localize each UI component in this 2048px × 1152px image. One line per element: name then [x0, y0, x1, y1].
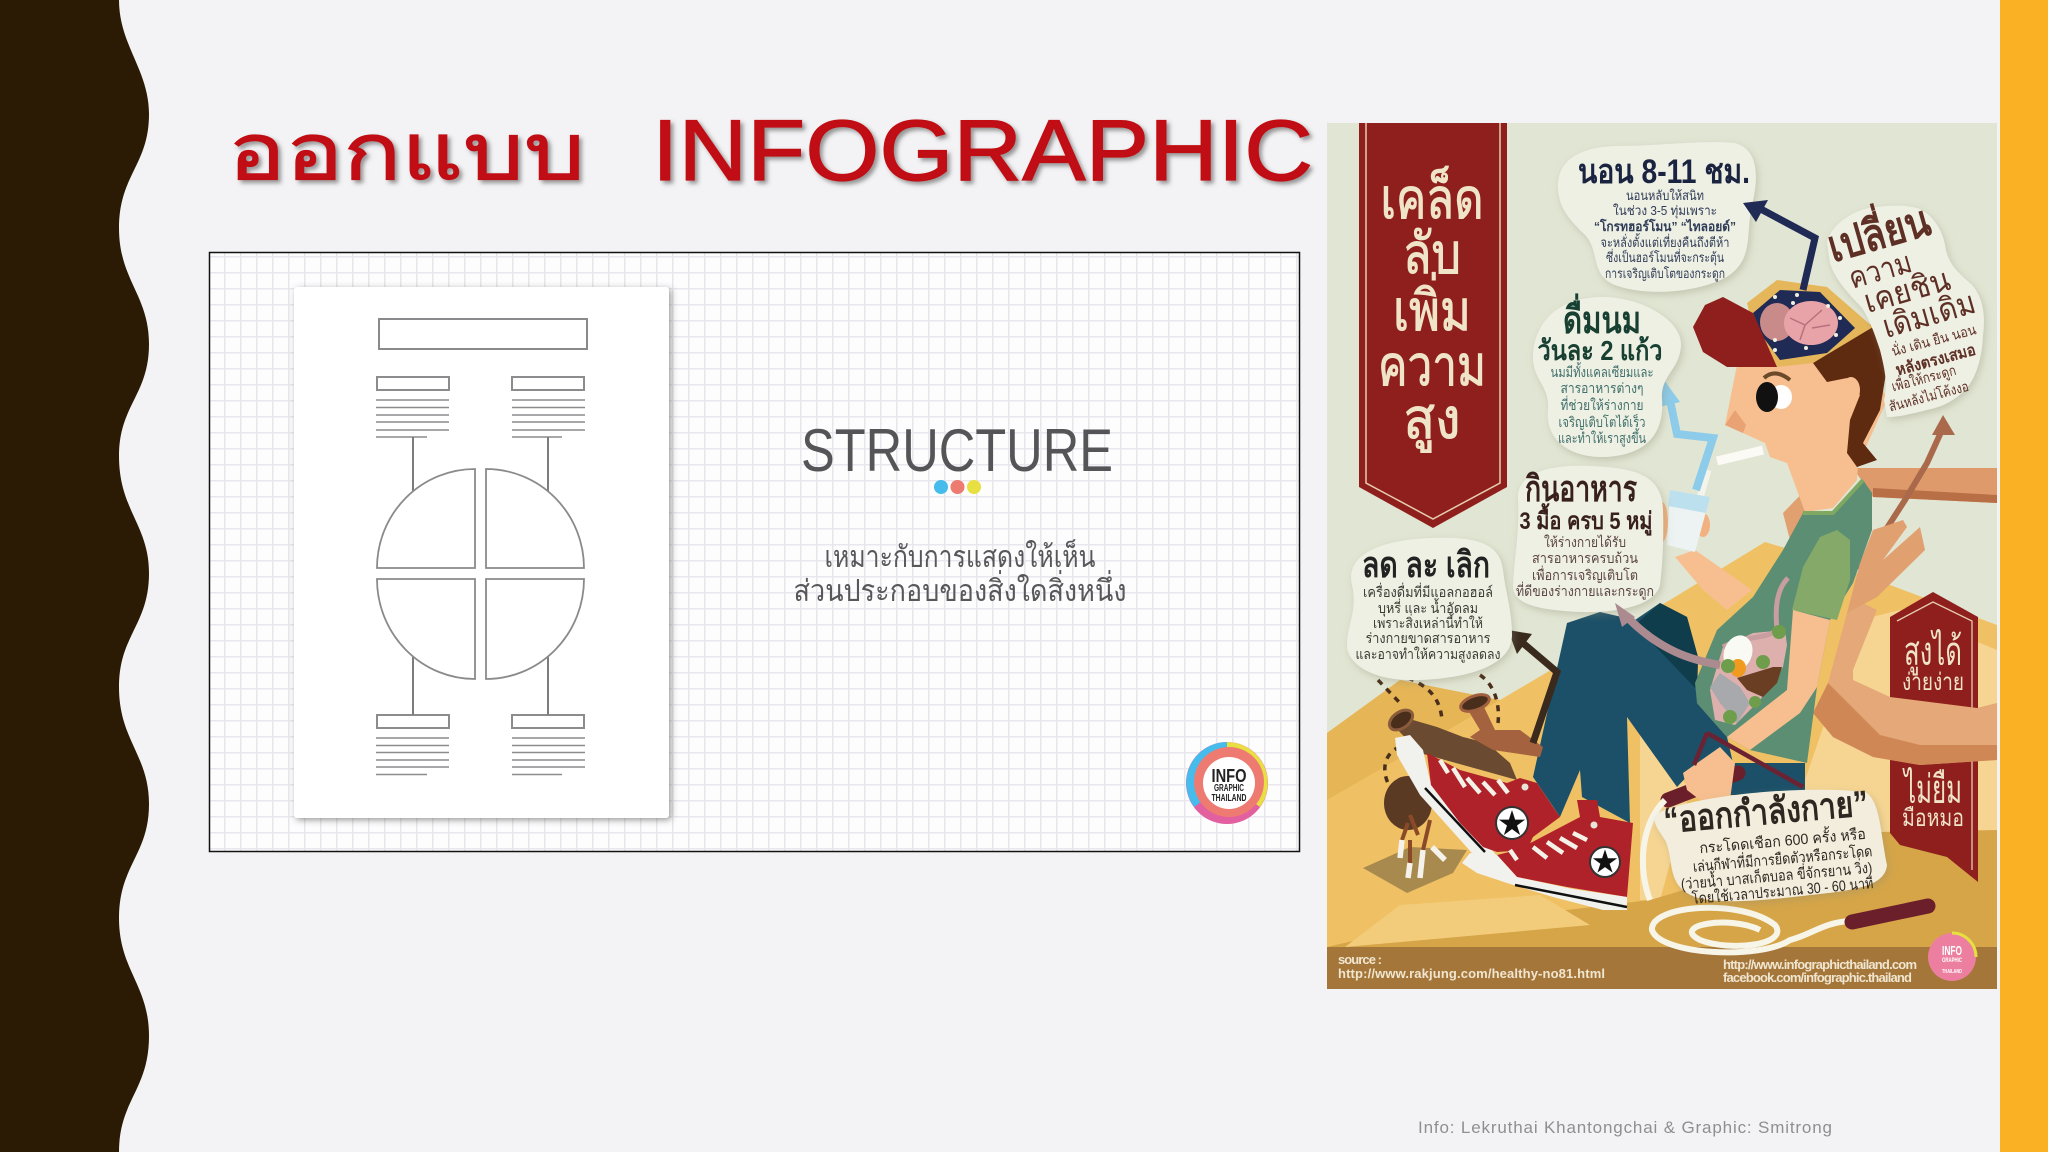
front arm and hand — [1683, 610, 1830, 800]
open skull — [1753, 290, 1855, 360]
bubble: milk — [1533, 293, 1681, 457]
title — [228, 103, 1313, 199]
credit line: Info: Lekruthai Khantongchai & Graphic: Smitrong — [1418, 1118, 1832, 1137]
cigarettes — [1402, 815, 1430, 863]
bottom right heading and lines — [512, 715, 585, 774]
bottom left heading and lines — [376, 715, 449, 774]
logo: poster small — [1928, 933, 1976, 981]
dotted smoke lines — [1378, 675, 1498, 787]
bubble: milk: และทำให้เราสูงขึ้น — [1558, 428, 1646, 447]
bubble: exercise: (ว่ายน้ำ บาสเก็ตบอล ขี่จักรยาน วิ่ง) — [1680, 857, 1873, 893]
bubble: exercise: “ออกกำลังกาย” — [1662, 782, 1870, 841]
connector lines — [413, 437, 548, 715]
quartered circle — [377, 469, 584, 679]
sleeve — [1792, 530, 1850, 620]
red title banner: เคล็ด — [1380, 165, 1484, 230]
bubble: milk: วันละ 2 แก้ว — [1538, 335, 1662, 366]
bubble: reduce: บุหรี่ และ น้ำอัดลม — [1378, 598, 1478, 617]
bubble: reduce: ลด ละ เลิก — [1362, 544, 1490, 585]
template title box — [379, 319, 587, 349]
top left heading and lines — [376, 377, 449, 437]
bubble: posture: สันหลังไม่โค้งงอ — [1887, 378, 1970, 415]
character — [1533, 280, 1997, 823]
logo: info graphic thailand: GRAPHIC — [1214, 783, 1244, 794]
bubble: milk: เจริญเติบโตได้เร็ว — [1558, 413, 1646, 430]
bubble: sleep: การเจริญเติบโตของกระดูก — [1605, 266, 1725, 282]
right red hexagon banner: มือหมอ — [1902, 805, 1964, 832]
bubble: posture: ความ — [1845, 246, 1916, 296]
footer source text — [1338, 952, 1917, 985]
bubble: food — [1513, 466, 1663, 612]
bubble: sleep: นอนหลับให้สนิท — [1626, 188, 1704, 203]
straw — [1717, 450, 1763, 461]
structure description — [794, 538, 1126, 608]
bubble: reduce: ร่างกายขาดสารอาหาร — [1366, 630, 1491, 646]
bubble: reduce: เครื่องดื่มที่มีแอลกอฮอล์ — [1363, 583, 1493, 600]
arrow: brown to posture bubble — [1860, 430, 1942, 570]
bubble: sleep: ซึ่งเป็นฮอร์โมนที่จะกระตุ้น — [1606, 248, 1724, 266]
footer band — [1327, 947, 1997, 989]
bubble: posture — [1820, 189, 1984, 417]
bubble: milk: นมมีทั้งแคลเซียมและ — [1550, 362, 1654, 380]
sand shapes — [1327, 542, 1997, 947]
three coloured dots — [934, 480, 981, 494]
footer source text: facebook.com/infographic.thailand — [1723, 970, 1912, 985]
structure description: เหมาะกับการแสดงให้เห็น — [824, 538, 1096, 574]
panel: height infographic example — [1327, 123, 1997, 989]
cap — [1693, 297, 1777, 367]
bubble: posture: เคยชิน — [1860, 261, 1954, 320]
right red hexagon banner — [1890, 592, 1978, 882]
upper rope handle — [1668, 773, 1738, 800]
right red hexagon banner: ไม่ยืม — [1902, 767, 1962, 812]
bubble: milk: ที่ช่วยให้ร่างกาย — [1560, 396, 1644, 413]
arrowhead: pink — [1615, 603, 1635, 627]
bubble: sleep: จะหลั่งตั้งแต่เที่ยงคืนถึงตีห้า — [1600, 233, 1730, 250]
bubble: exercise: กระโดดเชือก 600 ครั้ง หรือ — [1698, 823, 1867, 857]
raised back arm — [1813, 520, 1997, 765]
shirt — [1695, 480, 1872, 763]
bubble: posture: เพื่อให้กระดูก — [1890, 361, 1958, 395]
bubble: exercise: โดยใช้เวลาประมาณ 30 - 60 นาที — [1691, 874, 1874, 908]
hair — [1813, 323, 1887, 467]
red title banner: เพิ่ม — [1393, 272, 1471, 342]
bubble: food: กินอาหาร — [1525, 468, 1637, 509]
shoe: lower — [1462, 800, 1633, 910]
bubble: posture: เดิมเดิม — [1878, 284, 1980, 345]
bubble: exercise: เล่นกีฬาที่มีการยืดตัวหรือกระโดด — [1692, 840, 1873, 876]
red title banner — [1359, 123, 1507, 528]
legs — [1533, 603, 1805, 823]
bubble: posture: เปลี่ยน — [1820, 189, 1936, 272]
bubble: posture: นั่ง เดิน ยืน นอน — [1889, 320, 1978, 359]
arrow: blue to milk bubble — [1670, 400, 1713, 490]
bubble: reduce — [1347, 538, 1512, 680]
right red hexagon banner: สูงได้ — [1904, 629, 1962, 675]
red title banner: สูง — [1404, 387, 1460, 453]
shoe: lower: ★ — [1592, 847, 1618, 877]
eye and brow — [1756, 373, 1792, 412]
bubble: posture: หลังตรงเสมอ — [1894, 341, 1978, 379]
bubble: exercise — [1655, 782, 1887, 908]
footer source text: http://www.infographicthailand.com — [1723, 957, 1917, 972]
bubble: food: เพื่อการเจริญเติบโต — [1532, 566, 1638, 583]
footer source text: source : — [1338, 952, 1382, 967]
bubble: sleep — [1558, 142, 1756, 292]
bottles and cigarettes — [1363, 675, 1543, 893]
wavy dark left border — [0, 0, 149, 1152]
footer source text: http://www.rakjung.com/healthy-no81.html — [1338, 966, 1605, 981]
title: ออกแบบ — [228, 108, 585, 196]
structure heading: STRUCTURE — [801, 417, 1113, 484]
forearm, hand and glass — [1656, 490, 1752, 610]
bubble: sleep: นอน 8-11 ชม. — [1578, 153, 1750, 191]
arrow: pink to food bubble — [1628, 618, 1720, 665]
bubble: food: ให้ร่างกายได้รับ — [1544, 534, 1626, 550]
nose shade — [1725, 410, 1746, 433]
stomach and food — [1710, 578, 1788, 725]
shoe: upper: ★ — [1498, 808, 1526, 839]
right red hexagon banner: ง่ายง่าย — [1902, 669, 1964, 696]
bubble: milk: สารอาหารต่างๆ — [1560, 380, 1644, 396]
skipping rope strap — [1694, 733, 1803, 787]
bubble: food: ที่ดีของร่างกายและกระดูก — [1516, 582, 1654, 600]
logo: info graphic thailand: INFO — [1212, 766, 1246, 786]
brain — [1760, 301, 1838, 345]
bubble: reduce: และอาจทำให้ความสูงลดลง — [1356, 646, 1500, 663]
top right heading and lines — [512, 377, 585, 437]
shoe: upper — [1395, 735, 1560, 862]
red title banner: ความ — [1378, 334, 1486, 397]
logo: poster small: GRAPHIC — [1942, 958, 1962, 964]
poster background — [1327, 123, 1997, 733]
template sheet — [294, 287, 669, 818]
yellow right bar — [2000, 0, 2048, 1152]
logo: poster small: THAILAND — [1942, 969, 1962, 975]
panel: structure template — [210, 252, 1300, 852]
title: INFOGRAPHIC — [652, 103, 1313, 199]
arrow: dark to reduce bubble — [1517, 638, 1557, 743]
logo: poster small: INFO — [1942, 943, 1962, 958]
bubble: food: สารอาหารครบถ้วน — [1532, 550, 1638, 566]
structure description: ส่วนประกอบของสิ่งใดสิ่งหนึ่ง — [794, 570, 1126, 608]
red title banner: ลับ — [1403, 222, 1461, 285]
skull dots — [1773, 293, 1842, 352]
bubble: sleep: ในช่วง 3-5 ทุ่มเพราะ — [1613, 203, 1717, 219]
background arm and chair shapes — [1783, 468, 1997, 540]
logo: info graphic thailand — [1186, 742, 1268, 824]
skipping rope — [1643, 800, 1928, 952]
bubble: reduce: เพราะสิ่งเหล่านี้ทำให้ — [1373, 613, 1483, 631]
bubble: food: 3 มื้อ ครบ 5 หมู่ — [1520, 502, 1652, 536]
bubble: sleep: “โกรทฮอร์โมน” “ไทลอยด์” — [1594, 218, 1736, 234]
logo: info graphic thailand: THAILAND — [1212, 793, 1246, 804]
cap rim — [1747, 280, 1873, 367]
arrow: navy to sleep bubble — [1757, 207, 1815, 290]
bubble: milk: ดื่มนม — [1563, 293, 1641, 342]
head and neck — [1725, 362, 1885, 511]
